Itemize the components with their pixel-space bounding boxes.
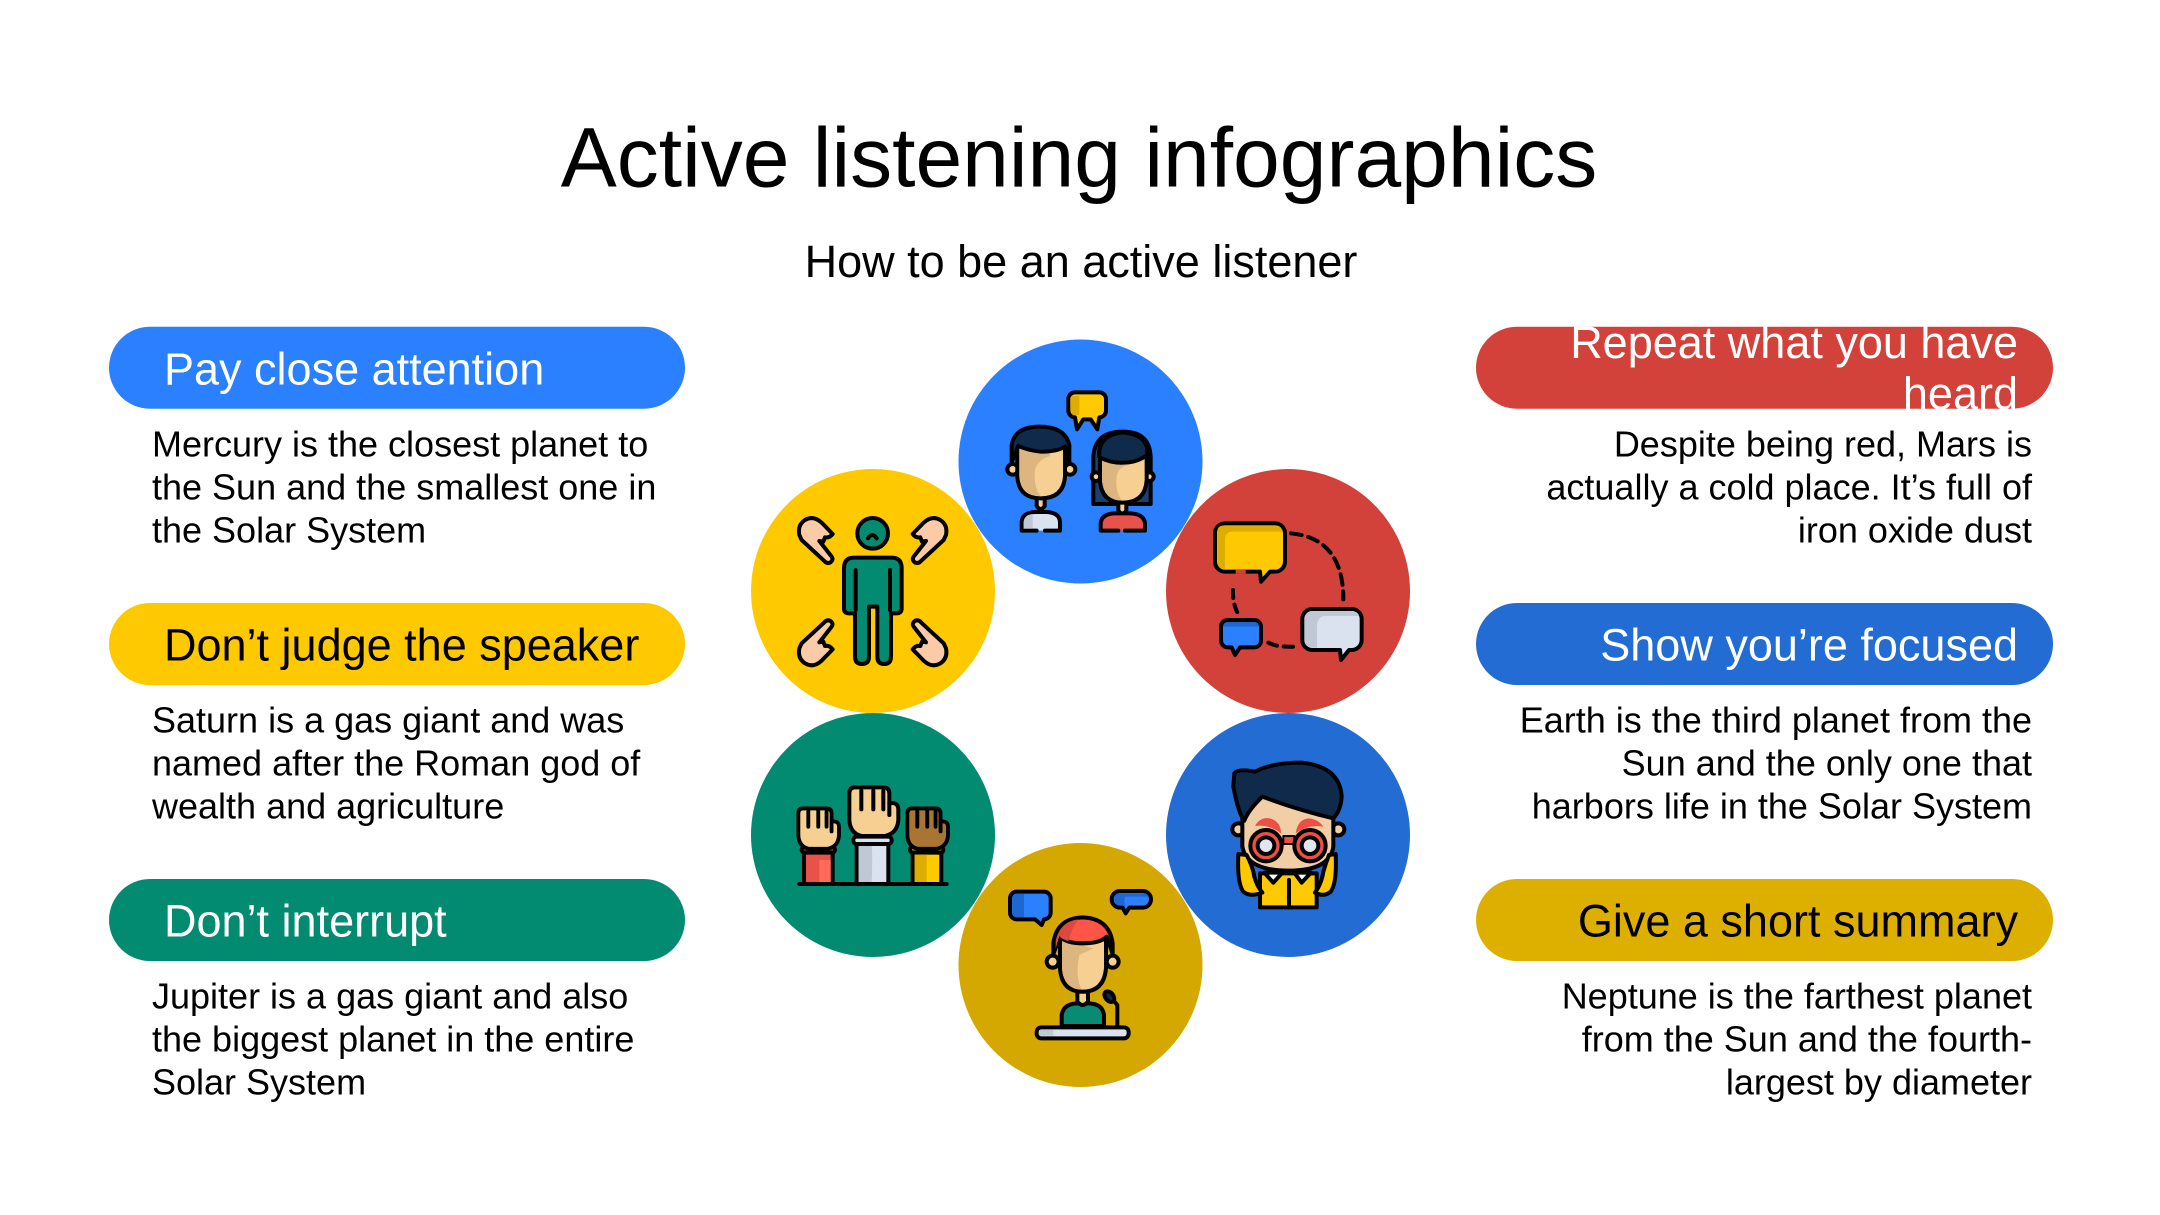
circle: dark blue focused listener bbox=[1166, 713, 1410, 957]
text block: earth bbox=[1520, 699, 2032, 826]
heading pill: show you're focused: Show you’re focused bbox=[1600, 620, 2018, 670]
title: Active listening infographics bbox=[561, 110, 1597, 204]
text block: mars: actually a cold place. It’s full of bbox=[1546, 466, 2033, 508]
heading pill: don't judge the speaker bbox=[109, 603, 685, 685]
text block: saturn: named after the Roman god of bbox=[152, 742, 641, 783]
heading pill: pay close attention bbox=[109, 327, 685, 409]
icon: person with glasses bbox=[1232, 763, 1344, 907]
heading pill: show you're focused bbox=[1476, 603, 2053, 685]
text block: neptune: from the Sun and the fourth- bbox=[1582, 1018, 2032, 1059]
text block: jupiter: Jupiter is a gas giant and also bbox=[152, 975, 628, 1016]
heading pill: pay close attention: Pay close attention bbox=[164, 344, 544, 394]
circle: red conversation loop bbox=[1166, 469, 1410, 713]
text block: jupiter bbox=[152, 975, 634, 1102]
text block: earth: Earth is the third planet from the bbox=[1520, 699, 2032, 740]
heading pill: repeat what you have heard bbox=[1476, 317, 2053, 419]
text block: saturn bbox=[151, 699, 641, 826]
text block: mercury: the Sun and the smallest one in bbox=[152, 466, 656, 508]
circle: yellow pointed-at person bbox=[751, 469, 995, 713]
text block: mars bbox=[1546, 424, 2033, 550]
text block: neptune bbox=[1562, 975, 2032, 1102]
heading pill: give a short summary bbox=[1476, 879, 2053, 961]
icon: raised hands bbox=[798, 787, 948, 884]
panel: don't judge the speaker bbox=[109, 603, 685, 826]
text block: saturn: Saturn is a gas giant and was bbox=[152, 699, 624, 740]
text block: mercury: the Solar System bbox=[152, 510, 426, 550]
heading pill: repeat what you have heard: Repeat what you have bbox=[1570, 317, 2018, 368]
icon: speaker at podium bbox=[1010, 891, 1151, 1038]
text block: earth: harbors life in the Solar System bbox=[1532, 785, 2032, 826]
text block: earth: Sun and the only one that bbox=[1622, 742, 2032, 783]
circle: green raised hands bbox=[751, 713, 995, 957]
circle: gold speaker bbox=[958, 843, 1202, 1087]
text block: mars: Despite being red, Mars is bbox=[1614, 424, 2032, 464]
icon: two people talking bbox=[1007, 392, 1154, 531]
panel: give a short summary bbox=[1476, 879, 2053, 1102]
text block: mercury: Mercury is the closest planet to bbox=[152, 424, 648, 464]
text block: saturn: wealth and agriculture bbox=[151, 785, 504, 826]
text block: mercury bbox=[152, 424, 656, 550]
heading pill: don't interrupt bbox=[109, 879, 685, 961]
heading pill: don't interrupt: Don’t interrupt bbox=[164, 896, 447, 946]
text block: jupiter: Solar System bbox=[152, 1061, 366, 1102]
text block: jupiter: the biggest planet in the entire bbox=[152, 1018, 634, 1059]
text block: neptune: largest by diameter bbox=[1726, 1061, 2032, 1102]
icon: person with pointing hands bbox=[799, 518, 946, 665]
panel: show you're focused bbox=[1476, 603, 2053, 826]
panel: pay close attention bbox=[109, 327, 685, 550]
panel: repeat what you have heard bbox=[1476, 317, 2053, 550]
subtitle: How to be an active listener bbox=[805, 236, 1357, 287]
icon: connected speech bubbles bbox=[1215, 523, 1362, 660]
panel: don't interrupt bbox=[109, 879, 685, 1102]
heading pill: don't judge the speaker: Don’t judge the speaker bbox=[164, 620, 639, 670]
text block: neptune: Neptune is the farthest planet bbox=[1562, 975, 2032, 1016]
heading pill: repeat what you have heard: heard bbox=[1903, 368, 2018, 419]
text block: mars: iron oxide dust bbox=[1798, 510, 2032, 550]
circle: blue two people bbox=[958, 340, 1202, 584]
heading pill: give a short summary: Give a short summary bbox=[1578, 896, 2018, 946]
